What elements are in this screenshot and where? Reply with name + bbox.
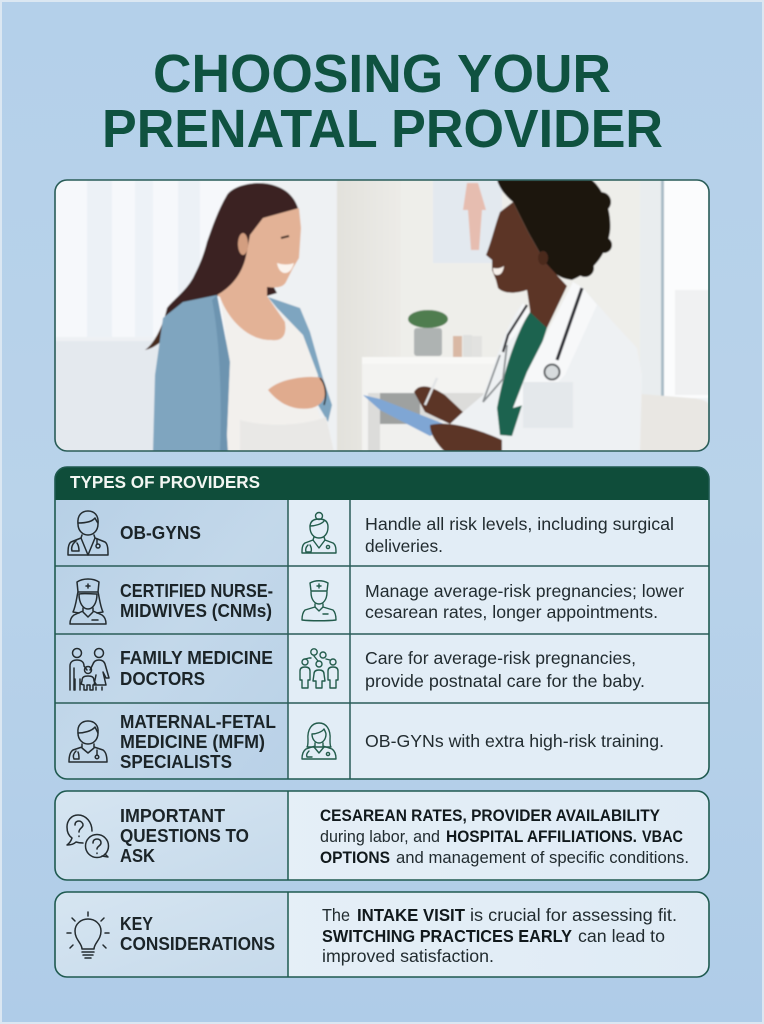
title bbox=[102, 44, 663, 159]
icon: question bubbles bbox=[67, 815, 108, 858]
label: certified nurse-midwives: CERTIFIED NURSE- bbox=[120, 581, 273, 601]
text: key considerations: SWITCHING PRACTICES EARLY bbox=[322, 926, 572, 946]
label: MFM specialists: MEDICINE (MFM) bbox=[120, 732, 265, 752]
icon: light bulb bbox=[67, 912, 109, 958]
text: key considerations bbox=[322, 905, 677, 966]
panel: types of providers bbox=[55, 467, 709, 779]
description: certified nurse-midwives: cesarean rates, longer appointments. bbox=[365, 602, 658, 622]
heading: types of providers: TYPES OF PROVIDERS bbox=[70, 472, 260, 492]
text: questions to ask: HOSPITAL AFFILIATIONS. bbox=[446, 828, 637, 846]
icon: nurse with bun bbox=[302, 512, 336, 553]
icon: family bbox=[70, 648, 109, 690]
text: questions to ask: CESAREAN RATES, PROVIDER AVAILABILITY bbox=[320, 807, 660, 825]
icon: MFM doctor bbox=[69, 721, 107, 762]
text: questions to ask: OPTIONS bbox=[320, 849, 390, 867]
label: important questions to ask bbox=[120, 806, 249, 866]
title: PRENATAL PROVIDER bbox=[102, 99, 663, 159]
photo: pregnant patient talking with doctor bbox=[55, 180, 709, 452]
label: certified nurse-midwives: MIDWIVES (CNMs) bbox=[120, 601, 272, 621]
label: important questions to ask: IMPORTANT bbox=[120, 806, 225, 826]
description: OB-GYNs bbox=[365, 514, 674, 556]
text: questions to ask: and management of specific conditions. bbox=[396, 849, 689, 867]
label: family medicine doctors bbox=[120, 648, 273, 689]
description: OB-GYNs: Handle all risk levels, including surgical bbox=[365, 514, 674, 534]
text: key considerations: improved satisfaction. bbox=[322, 946, 494, 966]
panel: key considerations bbox=[55, 892, 709, 977]
description: family medicine doctors: Care for average-risk pregnancies, bbox=[365, 648, 636, 668]
description: family medicine doctors: provide postnatal care for the baby. bbox=[365, 671, 645, 691]
text: key considerations: The bbox=[322, 905, 350, 925]
label: family medicine doctors: DOCTORS bbox=[120, 669, 205, 689]
description: certified nurse-midwives: Manage average-risk pregnancies; lower bbox=[365, 581, 684, 601]
label: OB-GYNs: OB-GYNS bbox=[120, 523, 201, 543]
icon: female doctor bbox=[302, 723, 336, 759]
text: questions to ask bbox=[320, 807, 689, 867]
description: MFM specialists: OB-GYNs with extra high-risk training. bbox=[365, 731, 664, 751]
text: key considerations: is crucial for assessing fit. bbox=[470, 905, 677, 925]
text: key considerations: can lead to bbox=[578, 926, 665, 946]
description: family medicine doctors bbox=[365, 648, 645, 691]
icon: nurse with cap bbox=[70, 579, 106, 624]
description: OB-GYNs: deliveries. bbox=[365, 536, 443, 556]
panel: important questions to ask bbox=[55, 791, 709, 880]
label: key considerations: CONSIDERATIONS bbox=[120, 934, 275, 954]
label: important questions to ask: QUESTIONS TO bbox=[120, 826, 249, 846]
icon: group of people bbox=[300, 649, 338, 688]
description: certified nurse-midwives bbox=[365, 581, 684, 622]
title: CHOOSING YOUR bbox=[153, 44, 611, 104]
label: key considerations: KEY bbox=[120, 914, 153, 934]
label: MFM specialists: MATERNAL-FETAL bbox=[120, 712, 276, 732]
icon: OB-GYN doctor bbox=[68, 511, 108, 555]
label: MFM specialists bbox=[120, 712, 276, 772]
text: questions to ask: VBAC bbox=[642, 828, 683, 846]
text: key considerations: INTAKE VISIT bbox=[357, 905, 465, 925]
label: important questions to ask: ASK bbox=[120, 846, 155, 866]
label: key considerations bbox=[120, 914, 275, 954]
label: family medicine doctors: FAMILY MEDICINE bbox=[120, 648, 273, 668]
icon: nurse bbox=[302, 581, 336, 621]
text: questions to ask: during labor, and bbox=[320, 828, 440, 846]
label: certified nurse-midwives bbox=[120, 581, 273, 621]
label: MFM specialists: SPECIALISTS bbox=[120, 752, 232, 772]
